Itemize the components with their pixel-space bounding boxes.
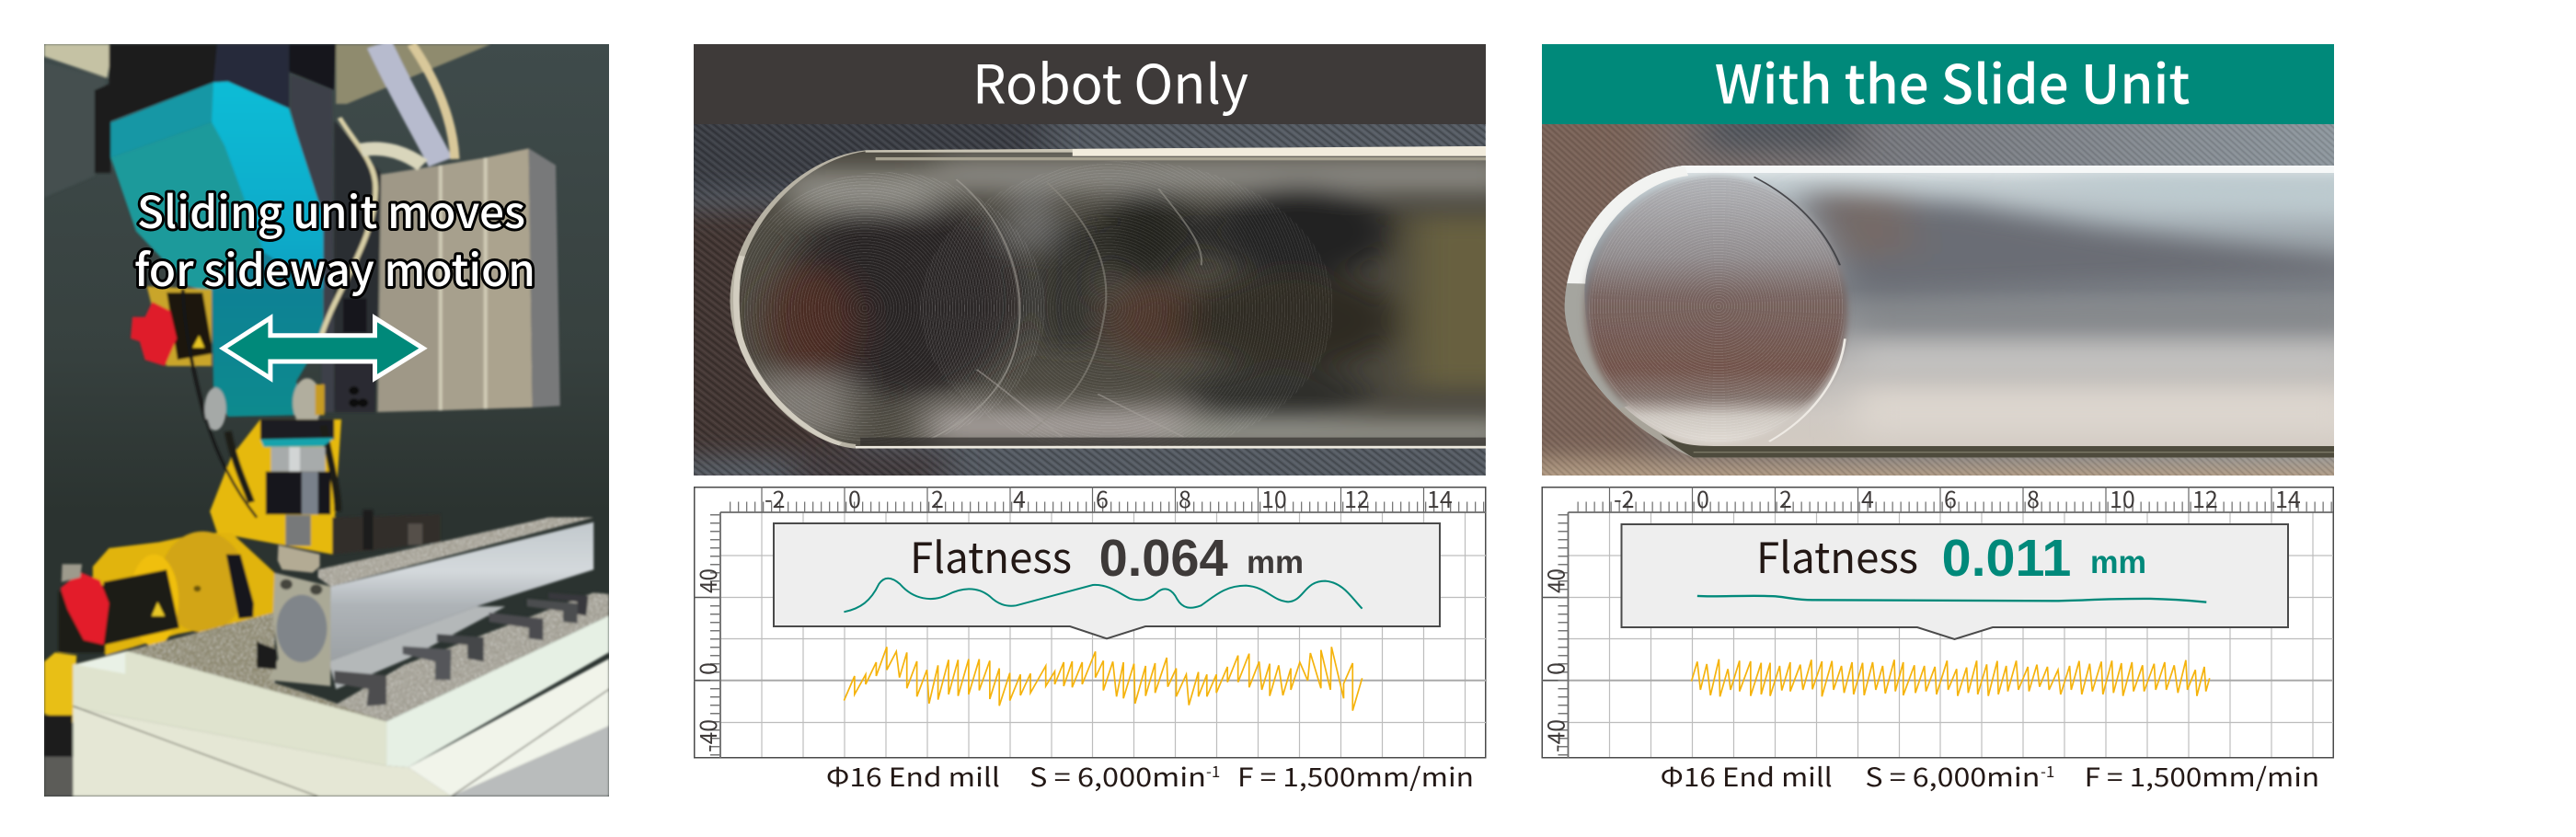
photo: machined slot, with the slide unit	[1542, 124, 2334, 476]
grid lines	[1568, 512, 2333, 757]
x axis labels: 2	[1779, 482, 1792, 515]
callout: flatness 0.064 mm: mm	[1247, 545, 1304, 580]
x axis labels	[1614, 482, 2301, 515]
spec line: robot only: F = 1,500mm/min	[1237, 758, 1474, 795]
y axis labels: 40	[1538, 568, 1571, 593]
header: robot only: Robot Only	[972, 42, 1248, 120]
caption: sliding unit moves: for sideway motion	[134, 235, 535, 299]
callout: flatness 0.011 mm: mm	[2090, 545, 2146, 580]
callout: flatness 0.011 mm: Flatness	[1756, 525, 1918, 586]
flatness curve	[1697, 596, 2206, 602]
chart: robot only	[691, 482, 1486, 758]
header: with the slide unit	[1542, 42, 2334, 124]
x axis labels: 8	[1179, 482, 1191, 515]
chart: with the slide unit	[1538, 482, 2333, 758]
x axis labels: 10	[2110, 482, 2135, 515]
spec line: robot only: S = 6,000min	[1029, 758, 1206, 795]
photo: machined slot, robot only	[694, 124, 1486, 476]
x axis labels: 14	[1427, 482, 1453, 515]
callout: flatness 0.064 mm: Flatness	[910, 525, 1072, 586]
caption: sliding unit moves	[134, 177, 535, 299]
y axis labels	[691, 568, 724, 752]
caption: sliding unit moves: Sliding unit moves	[137, 177, 525, 241]
x axis labels: 8	[2027, 482, 2040, 515]
spec line: with the slide unit: -1	[2041, 759, 2054, 782]
x axis labels	[765, 482, 1453, 515]
y axis labels: 40	[691, 568, 724, 593]
header: with the slide unit: With the Slide Unit	[1715, 42, 2190, 120]
spec line: with the slide unit: S = 6,000min	[1865, 758, 2040, 795]
y axis labels: 0	[1538, 662, 1571, 675]
callout: flatness 0.011 mm: 0.011	[1942, 529, 2071, 588]
callout: flatness 0.011 mm	[1621, 524, 2288, 639]
x axis labels: 4	[1013, 482, 1026, 515]
x axis labels: 4	[1861, 482, 1874, 515]
y axis labels: 0	[691, 662, 724, 675]
zigzag trace	[844, 647, 1363, 711]
grid lines	[720, 512, 1486, 757]
y axis labels: -40	[1538, 719, 1571, 752]
y axis labels	[1538, 568, 1571, 752]
x axis labels: 0	[1696, 482, 1709, 515]
x axis labels: 12	[2192, 482, 2218, 515]
spec line: robot only: Φ16 End mill	[826, 758, 1000, 795]
callout: flatness 0.064 mm: 0.064	[1099, 529, 1228, 588]
x axis labels: 6	[1096, 482, 1109, 515]
x axis labels: 6	[1944, 482, 1957, 515]
zigzag trace	[1692, 659, 2210, 696]
x axis labels: 0	[848, 482, 861, 515]
callout: flatness 0.064 mm	[774, 523, 1440, 638]
arrow: sideways motion	[224, 318, 423, 378]
y axis labels: -40	[691, 719, 724, 752]
spec line: robot only: -1	[1206, 759, 1220, 782]
flatness curve	[844, 579, 1363, 612]
x axis labels: -2	[765, 482, 786, 515]
spec line: with the slide unit: F = 1,500mm/min	[2085, 758, 2319, 795]
x axis labels: -2	[1614, 482, 1635, 515]
x axis labels: 10	[1261, 482, 1287, 515]
spec line: with the slide unit	[1661, 758, 2319, 795]
spec line: robot only	[826, 758, 1474, 795]
photo: robot with sliding unit	[44, 44, 609, 797]
x axis labels: 2	[931, 482, 944, 515]
spec line: with the slide unit: Φ16 End mill	[1661, 758, 1833, 795]
x axis labels: 12	[1344, 482, 1370, 515]
x axis labels: 14	[2275, 482, 2301, 515]
header: robot only	[694, 42, 1486, 124]
